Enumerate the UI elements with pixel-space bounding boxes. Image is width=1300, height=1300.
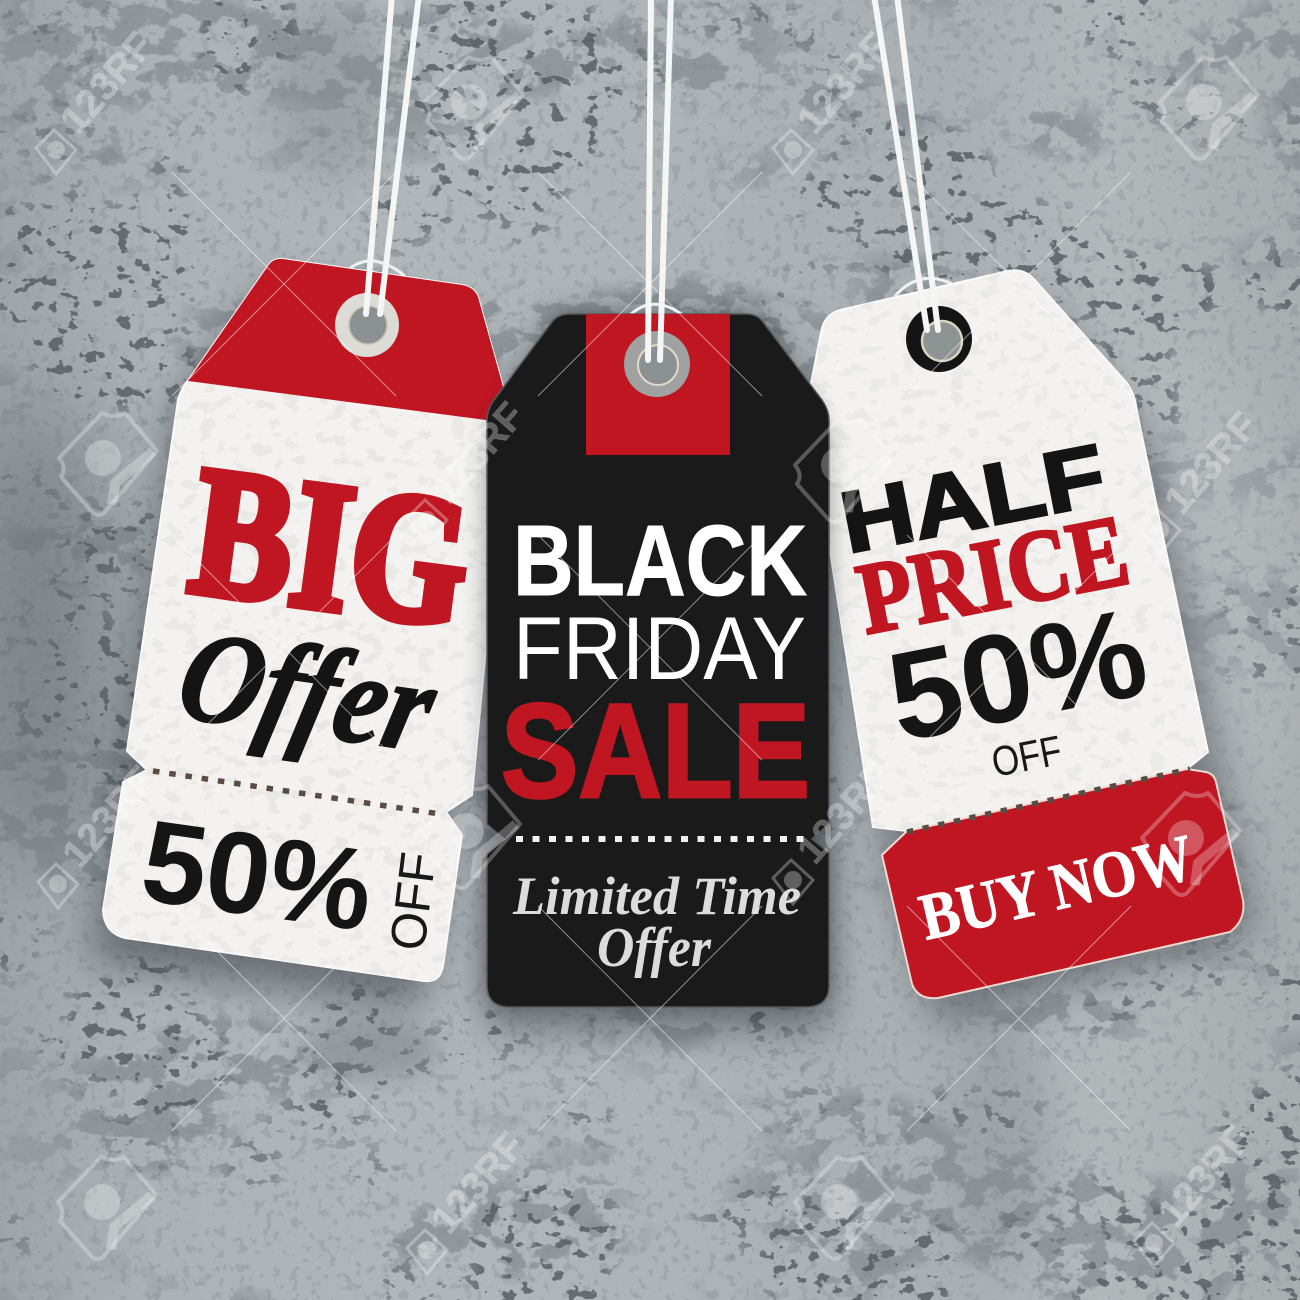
tag body	[807, 270, 1208, 831]
red label	[586, 314, 730, 455]
50 percent: 50%	[135, 795, 380, 956]
centre tag strings	[648, 0, 671, 360]
left tag strings	[366, 0, 419, 314]
panel: centre tag Black Friday Sale	[487, 314, 829, 1007]
panel: left tag Big Offer	[102, 258, 504, 982]
shadow of centre tag on side tags	[487, 316, 829, 1000]
watermark: small 123RF stamps: 123RF	[1156, 405, 1266, 522]
limited time offer	[512, 866, 801, 979]
eyelet	[335, 293, 399, 357]
paper texture	[814, 272, 1208, 830]
left tag string loop	[346, 261, 405, 276]
watermark: small 123RF stamps: 123RF	[789, 25, 899, 142]
paper texture	[104, 381, 486, 980]
heading FRIDAY: FRIDAY	[513, 598, 806, 698]
heading PRICE: PRICE	[849, 494, 1137, 657]
right tag string loop	[895, 278, 952, 296]
watermark: small 123RF stamps: 123RF	[423, 395, 533, 512]
OFF: OFF	[988, 726, 1065, 786]
watermark: small 123RF stamps: 123RF	[52, 25, 162, 142]
watermark: small 123RF stamps: 123RF	[423, 1125, 533, 1242]
heading HALF: HALF	[833, 427, 1113, 572]
watermark: small 123RF stamps: 123RF	[54, 759, 164, 876]
limited time offer: Offer	[597, 917, 712, 979]
red buy now tab	[882, 769, 1243, 998]
watermark: small 123RF stamps: 123RF	[1150, 1118, 1260, 1235]
watermark: small 123RF stamps: 123RF	[789, 755, 899, 872]
eyelet	[906, 306, 972, 372]
script Offer: Offer	[165, 604, 451, 779]
tag body	[487, 314, 829, 1007]
eyelet	[624, 331, 690, 397]
perforation dots	[516, 836, 806, 842]
watermark crosses	[172, 172, 1131, 1131]
vertical OFF: OFF	[379, 849, 447, 953]
perforation dots	[907, 769, 1190, 832]
centre tag string loop	[628, 304, 684, 317]
50 percent: 50%	[877, 581, 1157, 769]
tag body	[103, 259, 509, 981]
tag shadows on the wall	[91, 285, 1255, 1030]
heading BIG: BIG	[181, 427, 481, 666]
panel: right tag Half Price	[810, 269, 1244, 1000]
buy now label: BUY NOW	[913, 821, 1200, 955]
limited time offer: Limited Time	[512, 866, 801, 926]
heading SALE: SALE	[501, 677, 810, 826]
perforation dots	[153, 771, 440, 814]
red cap	[188, 258, 503, 420]
right tag strings	[874, 0, 938, 330]
heading BLACK: BLACK	[513, 505, 807, 617]
